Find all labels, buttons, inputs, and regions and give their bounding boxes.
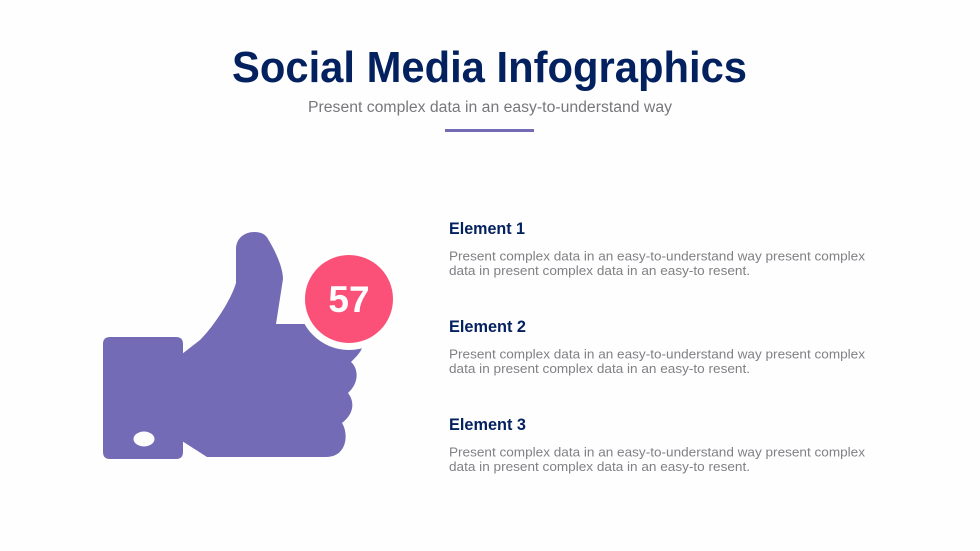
element 1 xyxy=(449,219,866,278)
element 1 body: Present complex data in an easy-to-understand way present complex xyxy=(449,248,866,264)
element 1 body: data in present complex data in an easy-to resent. xyxy=(449,263,750,278)
icon: thumbs up with badge xyxy=(103,232,400,459)
element 2 body: Present complex data in an easy-to-understand way present complex xyxy=(449,346,866,362)
badge number: 57 xyxy=(328,279,370,320)
element 3 xyxy=(449,415,866,474)
element 2 body: data in present complex data in an easy-to resent. xyxy=(449,361,750,376)
subtitle: Present complex data in an easy-to-understand way xyxy=(308,99,672,116)
thumb cuff xyxy=(103,337,183,459)
element 2 heading: Element 2 xyxy=(449,317,526,336)
element 2 xyxy=(449,317,866,376)
element 3 body: Present complex data in an easy-to-understand way present complex xyxy=(449,444,866,460)
badge circle xyxy=(305,255,393,343)
badge ring xyxy=(298,248,400,350)
element 1 heading: Element 1 xyxy=(449,219,525,238)
element 3 body: data in present complex data in an easy-to resent. xyxy=(449,459,750,474)
title underline xyxy=(445,129,534,132)
element 3 heading: Element 3 xyxy=(449,415,526,434)
thumb hand xyxy=(182,232,362,457)
title: Social Media Infographics xyxy=(232,43,747,92)
